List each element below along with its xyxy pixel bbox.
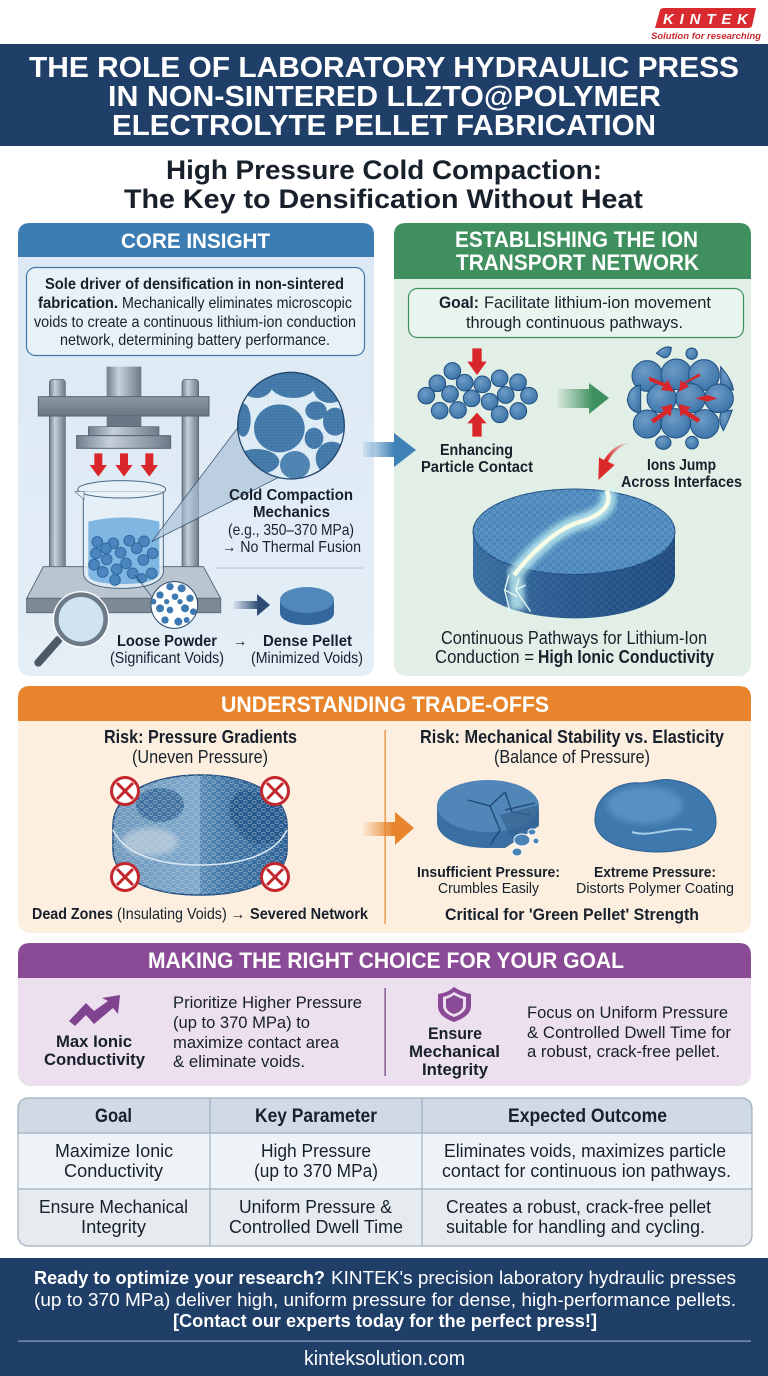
ion transport header: TRANSPORT NETWORK xyxy=(456,250,699,275)
loose powder and dense pellet captions: (Minimized Voids) xyxy=(251,650,363,667)
loose powder and dense pellet captions xyxy=(110,633,363,667)
dead zones caption: (Insulating Voids) → xyxy=(117,906,245,923)
panel: core insight xyxy=(18,223,374,676)
higher pressure text: maximize contact area xyxy=(173,1033,340,1052)
left risk heading xyxy=(104,727,297,767)
core insight text box: Mechanically eliminates microscopic xyxy=(122,295,352,312)
pellet with pressure gradients xyxy=(113,775,287,895)
micro view circle xyxy=(237,372,345,480)
mechanical integrity label xyxy=(409,1024,500,1079)
cold compaction label: → No Thermal Fusion xyxy=(222,539,361,556)
red press arrows xyxy=(90,453,158,477)
subtitle xyxy=(124,155,643,214)
beaker xyxy=(75,481,166,588)
table row: mechanical integrity: suitable for handling and cycling. xyxy=(446,1217,705,1237)
illustration: hydraulic press and beaker xyxy=(27,367,348,663)
title banner xyxy=(0,44,768,146)
cold compaction label: Cold Compaction xyxy=(229,487,353,504)
conductive pellet xyxy=(473,489,675,618)
right choice header: MAKING THE RIGHT CHOICE FOR YOUR GOAL xyxy=(148,948,624,973)
table row: ionic conductivity: Maximize Ionic xyxy=(55,1141,173,1161)
core insight text box: network, determining battery performance. xyxy=(60,332,330,349)
table row: ionic conductivity: (up to 370 MPa) xyxy=(254,1161,378,1181)
cold compaction label: (e.g., 350–370 MPa) xyxy=(228,522,354,539)
distorted pellet xyxy=(595,780,716,852)
core insight text box: Sole driver of densification in non-sintered xyxy=(45,276,344,293)
loose powder and dense pellet captions: Dense Pellet xyxy=(263,633,353,650)
mechanical integrity label: Integrity xyxy=(422,1060,489,1079)
arrow: blue between panels xyxy=(363,433,416,467)
uniform pressure text xyxy=(527,1003,731,1061)
max ionic conductivity label xyxy=(44,1032,146,1069)
dead zones caption: Dead Zones xyxy=(32,906,113,923)
icon: shield xyxy=(438,987,471,1022)
right risk heading: Risk: Mechanical Stability vs. Elasticity xyxy=(420,727,724,747)
core insight text box: voids to create a continuous lithium-ion conduction xyxy=(34,314,356,331)
cold compaction label xyxy=(222,487,361,556)
goal box xyxy=(408,288,744,338)
table row: ionic conductivity: Eliminates voids, maximizes particle xyxy=(444,1141,726,1161)
higher pressure text: & eliminate voids. xyxy=(173,1052,305,1071)
dead zones caption xyxy=(32,906,368,923)
logo: KINTEK xyxy=(651,8,762,41)
footer call to action: [Contact our experts today for the perfect press!] xyxy=(173,1311,597,1331)
loose powder and dense pellet captions: Loose Powder xyxy=(117,633,217,650)
conductivity caption xyxy=(435,628,714,667)
particle captions: Across Interfaces xyxy=(621,474,742,491)
title banner: IN NON-SINTERED LLZTO@POLYMER xyxy=(108,81,661,113)
table row: mechanical integrity: Controlled Dwell Time xyxy=(229,1217,403,1237)
ion transport header xyxy=(394,223,751,279)
callout cone to micro view xyxy=(152,428,280,542)
beaker particles xyxy=(89,535,158,585)
footer call to action: (up to 370 MPa) deliver high, uniform pressure for dense, high-performance pellets. xyxy=(34,1290,736,1310)
illustration: loose particle cluster xyxy=(418,348,537,437)
panel: understanding trade-offs xyxy=(18,686,751,933)
core insight text box: fabrication. xyxy=(38,295,118,312)
cracked pellet xyxy=(437,780,539,856)
icon: dense pellet xyxy=(280,587,334,625)
max ionic conductivity label: Conductivity xyxy=(44,1050,146,1069)
left risk heading: (Uneven Pressure) xyxy=(132,747,268,767)
particle captions: Ions Jump xyxy=(647,457,716,474)
higher pressure text xyxy=(173,993,362,1071)
pressure captions: Crumbles Easily xyxy=(438,880,539,897)
illustration: compacted particles with red arrows xyxy=(473,347,733,618)
table header row: Key Parameter xyxy=(255,1106,378,1127)
panel: making the right choice xyxy=(18,943,751,1086)
arrow: green compaction xyxy=(557,383,609,414)
uniform pressure text: Focus on Uniform Pressure xyxy=(527,1003,728,1022)
core insight header: CORE INSIGHT xyxy=(121,230,270,253)
conductivity caption: Continuous Pathways for Lithium-Ion xyxy=(441,628,707,648)
panel: establishing the ion transport network xyxy=(394,223,751,676)
subtitle: The Key to Densification Without Heat xyxy=(124,184,643,214)
goal box: through continuous pathways. xyxy=(466,313,683,332)
title banner: THE ROLE OF LABORATORY HYDRAULIC PRESS xyxy=(29,52,739,84)
title banner: ELECTROLYTE PELLET FABRICATION xyxy=(112,110,656,142)
logo: KINTEK: KINTEK xyxy=(663,11,749,28)
table row: mechanical integrity: Uniform Pressure & xyxy=(239,1197,392,1217)
comparison table xyxy=(18,1098,752,1246)
curved red arrow xyxy=(598,443,631,480)
core insight header xyxy=(18,223,374,257)
dead zones caption: Severed Network xyxy=(250,906,368,923)
table row: ionic conductivity xyxy=(55,1141,731,1181)
pressure captions: Insufficient Pressure: xyxy=(417,864,560,881)
right risk heading: (Balance of Pressure) xyxy=(494,747,650,767)
footer call to action: Ready to optimize your research? xyxy=(34,1268,325,1288)
subtitle: High Pressure Cold Compaction: xyxy=(166,155,602,185)
higher pressure text: (up to 370 MPa) to xyxy=(173,1013,310,1032)
uniform pressure text: & Controlled Dwell Time for xyxy=(527,1023,731,1042)
table row: mechanical integrity: Integrity xyxy=(81,1217,146,1237)
table row: mechanical integrity: Creates a robust, crack-free pellet xyxy=(446,1197,711,1217)
footer call to action: KINTEK's precision laboratory hydraulic presses xyxy=(331,1268,736,1288)
loose powder and dense pellet captions: (Significant Voids) xyxy=(110,650,224,667)
right choice header xyxy=(18,943,751,978)
core insight text box xyxy=(26,268,364,356)
table header row xyxy=(95,1106,667,1127)
right risk heading xyxy=(420,727,724,767)
logo: KINTEK: Solution for researching xyxy=(651,31,762,41)
loose powder and dense pellet captions: → xyxy=(233,633,247,650)
table row: mechanical integrity: Ensure Mechanical xyxy=(39,1197,188,1217)
uniform pressure text: a robust, crack-free pellet. xyxy=(527,1042,720,1061)
table header row: Expected Outcome xyxy=(508,1106,667,1127)
left risk heading: Risk: Pressure Gradients xyxy=(104,727,297,747)
table row: ionic conductivity: High Pressure xyxy=(261,1141,371,1161)
trade-offs header: UNDERSTANDING TRADE-OFFS xyxy=(221,692,549,717)
table row: mechanical integrity xyxy=(39,1197,711,1237)
conductivity caption: High Ionic Conductivity xyxy=(538,647,714,667)
particle captions: Particle Contact xyxy=(421,459,534,476)
icon: rising arrow xyxy=(69,995,120,1026)
pressure captions: Extreme Pressure: xyxy=(594,864,716,881)
pressure captions xyxy=(417,864,734,897)
magnifier and loose powder view xyxy=(38,575,198,663)
table header row: Goal xyxy=(95,1106,132,1127)
goal box: Facilitate lithium-ion movement xyxy=(484,293,711,312)
trade-offs header xyxy=(18,686,751,721)
particle captions xyxy=(421,442,742,491)
footer call to action: kinteksolution.com xyxy=(304,1348,465,1370)
table row: ionic conductivity: Conductivity xyxy=(64,1161,163,1181)
table row: ionic conductivity: contact for continuous ion pathways. xyxy=(442,1161,731,1181)
max ionic conductivity label: Max Ionic xyxy=(56,1032,132,1051)
pressure captions: Distorts Polymer Coating xyxy=(576,880,734,897)
mechanical integrity label: Mechanical xyxy=(409,1042,500,1061)
higher pressure text: Prioritize Higher Pressure xyxy=(173,993,362,1012)
green pellet note: Critical for 'Green Pellet' Strength xyxy=(445,905,699,924)
mechanical integrity label: Ensure xyxy=(428,1024,482,1043)
conductivity caption: Conduction = xyxy=(435,647,534,667)
cold compaction label: Mechanics xyxy=(253,504,330,521)
arrow: orange xyxy=(363,812,414,845)
icons: red X warnings xyxy=(112,778,288,890)
footer call to action xyxy=(0,1258,768,1376)
ion transport header: ESTABLISHING THE ION xyxy=(455,227,698,252)
particle captions: Enhancing xyxy=(440,442,513,459)
goal box: Goal: xyxy=(439,293,479,312)
arrow: powder to pellet xyxy=(233,594,270,616)
